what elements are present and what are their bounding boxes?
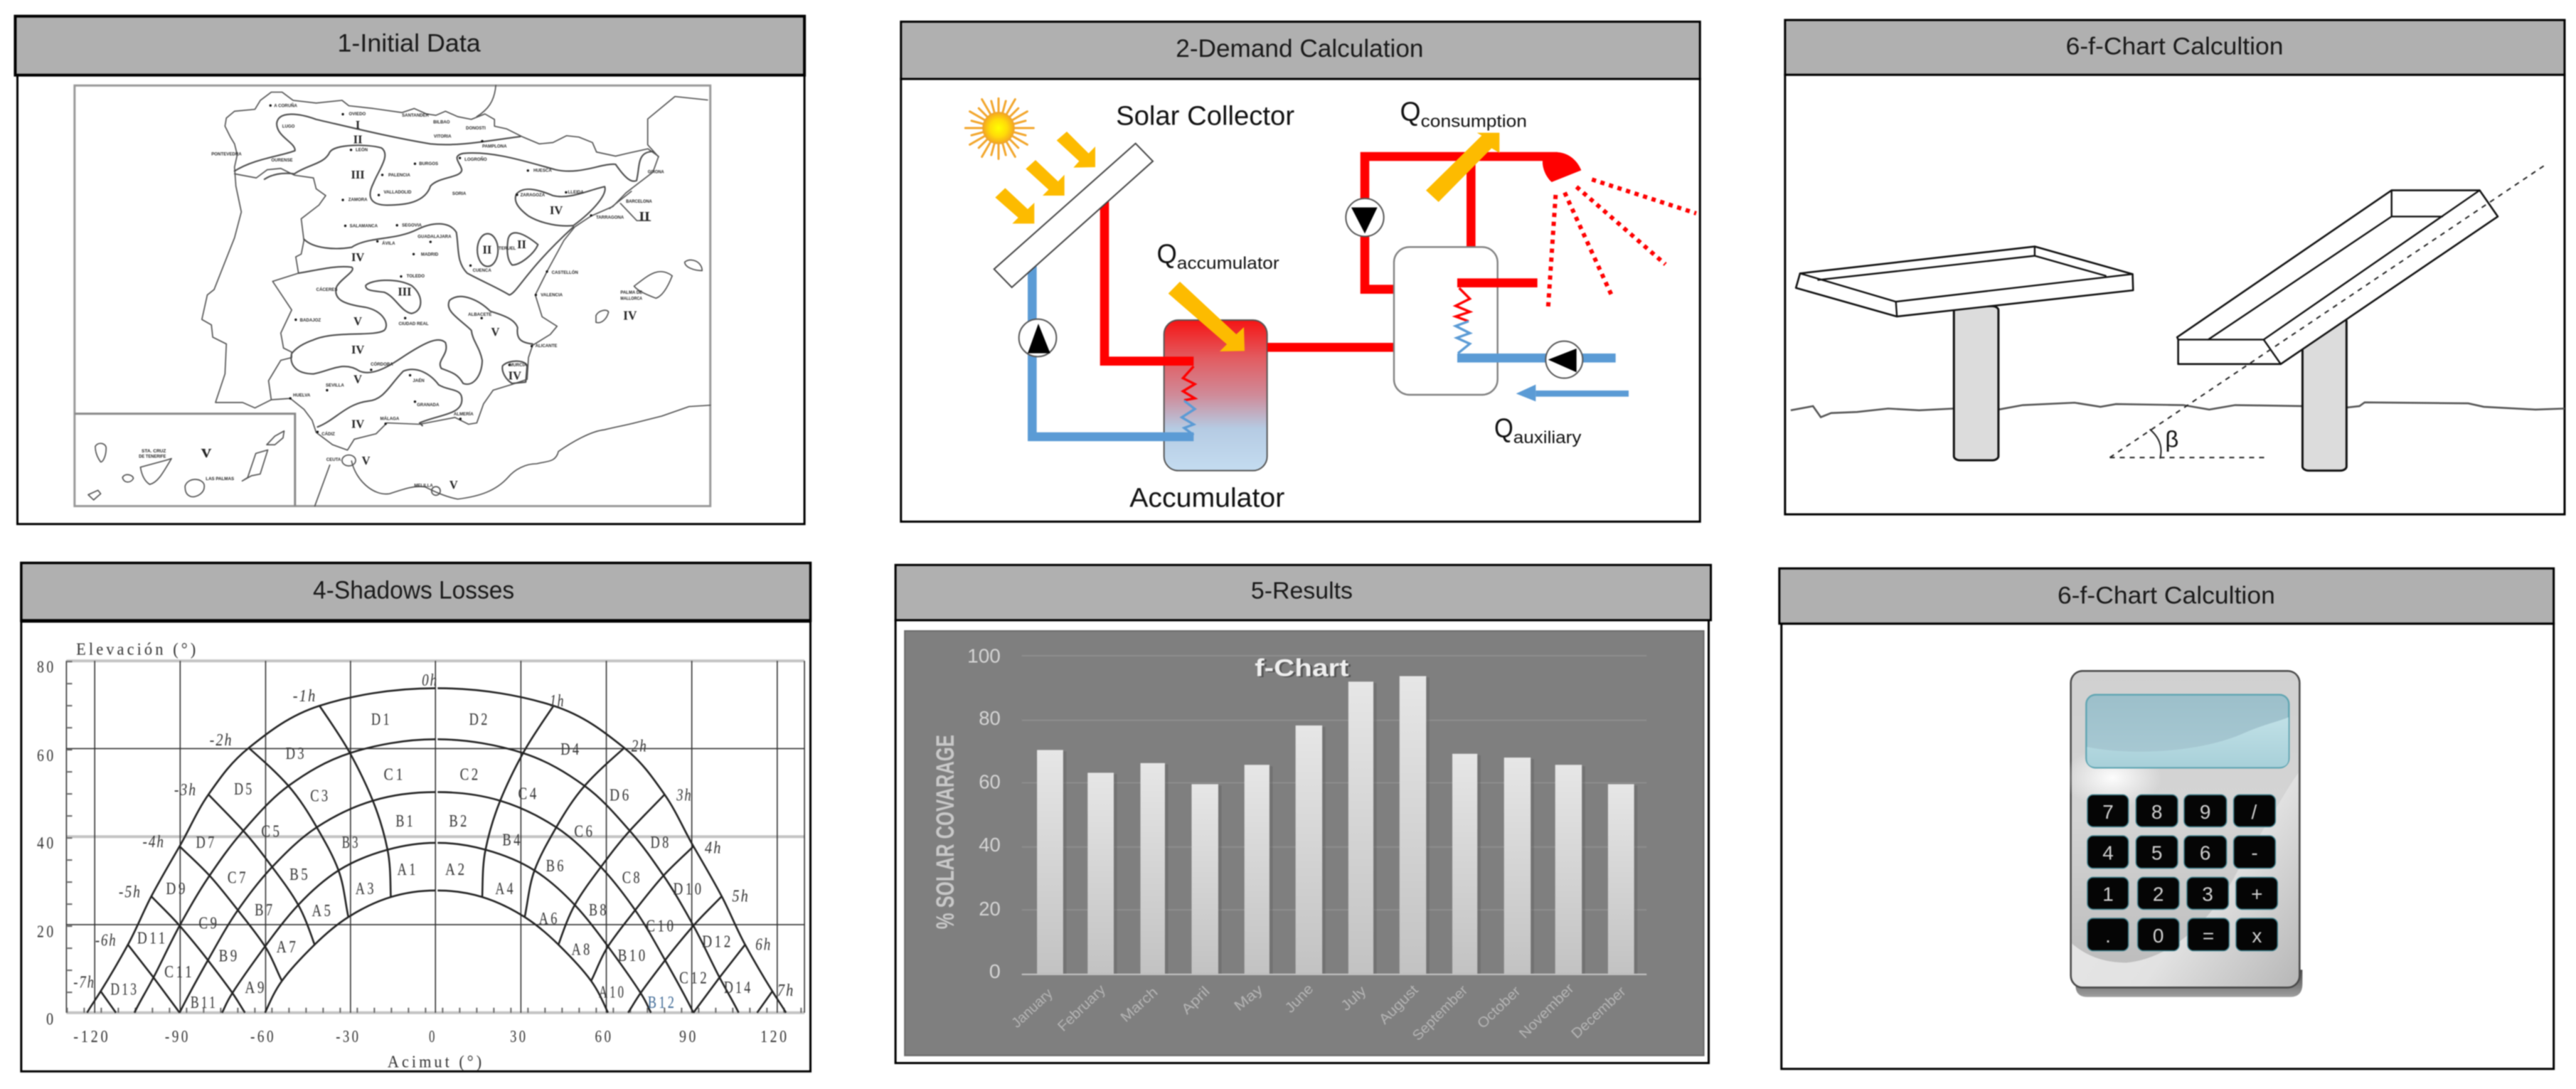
calculator keys: / <box>2251 801 2257 823</box>
panel: 1-Initial Data <box>15 16 804 524</box>
city labels: LOGROÑO <box>464 157 487 162</box>
city labels: ALICANTE <box>536 344 558 349</box>
diagram labels: Q <box>1156 238 1177 269</box>
city labels: ALMERÍA <box>454 411 474 417</box>
axis labels: 120 <box>760 1027 789 1046</box>
sector labels: B1 <box>395 811 415 830</box>
map extras: islands and eastern labels: II <box>639 209 650 224</box>
sector labels: B9 <box>219 945 240 965</box>
chart title: f-Chart <box>1255 654 1349 681</box>
calculator keys: 4 <box>2102 841 2114 864</box>
hour labels: -2h <box>210 730 233 749</box>
city labels: MURCIA <box>509 363 527 368</box>
calculator keys: + <box>2251 883 2263 905</box>
axis labels: 40 <box>37 834 56 853</box>
sector labels: D13 <box>110 979 139 999</box>
y axis values: 60 <box>979 770 1001 793</box>
consumption side of the circuit <box>1267 133 1696 401</box>
zone numerals: IV <box>550 203 563 217</box>
y axis title: % SOLAR COVARAGE <box>932 735 959 929</box>
sector labels: A3 <box>356 878 376 898</box>
axis labels: 0 <box>429 1027 437 1046</box>
month labels: November <box>1516 981 1577 1042</box>
sector labels: B11 <box>191 992 218 1011</box>
diagram labels: Q <box>1400 97 1421 127</box>
sector labels: C11 <box>164 962 194 982</box>
sector labels: C2 <box>460 765 481 784</box>
calculator keys: 7 <box>2102 801 2114 823</box>
sun path curves right <box>437 689 786 1013</box>
zone numerals: II <box>517 238 526 251</box>
zone numerals: II <box>482 243 491 257</box>
panel: 6-f-Chart Calcultion (calculator) <box>1779 568 2554 1069</box>
axis labels: -120 <box>73 1027 110 1046</box>
axis labels: -60 <box>250 1027 276 1046</box>
zone numerals: III <box>398 285 412 298</box>
city labels: DONOSTI <box>466 126 486 131</box>
panel: 5-Results <box>895 565 1711 1063</box>
y axis values: 40 <box>979 833 1001 856</box>
map extras: islands and eastern labels: DE TENERIFE <box>139 454 166 459</box>
y axis values: 20 <box>979 897 1001 920</box>
month labels: March <box>1118 984 1161 1026</box>
zone numerals: IV <box>351 343 364 356</box>
axis labels: 0 <box>46 1009 56 1029</box>
sector labels: B7 <box>255 900 275 919</box>
sector labels: A10 <box>599 982 626 1002</box>
sector labels: C3 <box>310 786 331 805</box>
calculator screen <box>2086 695 2289 767</box>
city labels: LEÓN <box>356 147 368 153</box>
calculator keys: 9 <box>2200 801 2210 823</box>
sector labels: B6 <box>546 856 566 876</box>
calculator keys: 2 <box>2153 883 2163 905</box>
zone numerals: IV <box>351 250 364 264</box>
axis labels: -90 <box>165 1027 191 1046</box>
bars <box>1037 676 1637 974</box>
y axis values: 0 <box>989 960 1001 982</box>
calculator keys: - <box>2251 841 2258 864</box>
map extras: islands and eastern labels: LAS PALMAS <box>206 476 234 482</box>
panel: 4-Shadows Losses <box>21 563 811 1071</box>
sector labels: D1 <box>371 709 392 728</box>
diagram labels: Solar Collector <box>1116 100 1294 131</box>
heading: 6-f-Chart Calcultion: 6-f-Chart Calcultion <box>2066 33 2283 60</box>
consumption pump <box>1346 198 1384 236</box>
city labels: A CORUÑA <box>274 104 298 109</box>
hour labels: -5h <box>119 882 142 901</box>
shower water spray <box>1548 179 1696 308</box>
bar chart: f-Chart solar coverage <box>905 631 1704 1056</box>
hour labels: 6h <box>755 934 772 954</box>
collector side of the circuit <box>965 98 1267 471</box>
sector labels: B12 <box>648 992 676 1011</box>
sun path chart: D14 <box>724 977 752 997</box>
axis labels: 60 <box>37 746 56 765</box>
sector labels: D7 <box>196 832 217 852</box>
arrow: Q consumption <box>1426 133 1499 202</box>
sector labels: D4 <box>560 739 581 758</box>
city labels: ALBACETE <box>468 312 491 317</box>
sector labels: D9 <box>166 878 188 898</box>
arrow: Q auxiliary <box>1516 385 1629 401</box>
hour labels: -1h <box>293 686 316 705</box>
axis labels <box>37 639 789 1071</box>
calculator keys: 6 <box>2200 841 2210 864</box>
sector labels: D2 <box>469 709 490 728</box>
city labels: MADRID <box>421 253 439 257</box>
hour labels: 3h <box>676 785 692 804</box>
hour labels <box>73 670 794 999</box>
axis labels: 90 <box>679 1027 698 1046</box>
arrow: Q accumulator <box>1169 282 1245 351</box>
sun path chart <box>37 639 804 1071</box>
city labels: ZAMORA <box>348 198 368 203</box>
sector labels: A2 <box>445 859 467 878</box>
axis labels: Elevación (°) <box>76 639 198 659</box>
sector labels: D8 <box>651 832 671 852</box>
city labels: ÁVILA <box>382 241 395 246</box>
sector labels: B4 <box>502 829 523 849</box>
month labels: January <box>1008 986 1056 1031</box>
axis labels: 20 <box>37 922 56 941</box>
month labels: September <box>1410 982 1471 1044</box>
zone numerals: V <box>449 478 458 492</box>
month labels <box>1008 981 1629 1044</box>
axis labels: 80 <box>37 657 56 677</box>
sun path curves left <box>87 689 435 1013</box>
hour labels: 5h <box>732 886 750 905</box>
city labels: SORIA <box>452 191 467 196</box>
zone numerals: IV <box>351 417 364 430</box>
map extras: islands and eastern labels: IV <box>623 308 637 323</box>
sector labels: A4 <box>495 878 516 898</box>
chart grid <box>66 661 804 1013</box>
map: climate zones of Spain <box>202 85 710 506</box>
sector labels: C12 <box>679 967 709 987</box>
map extras: islands and eastern labels <box>88 97 708 500</box>
collector loop pipes <box>1032 201 1195 437</box>
heading: 2-Demand Calculation: 2-Demand Calculation <box>1176 34 1423 63</box>
city labels: SANTANDER <box>402 113 430 118</box>
city labels: LUGO <box>282 124 295 129</box>
city labels: HUELVA <box>293 393 311 398</box>
sector labels: D6 <box>610 785 632 804</box>
map extras: islands and eastern labels: PALMA DE <box>620 289 642 294</box>
map extras: islands and eastern labels: GIRONA <box>648 169 664 174</box>
city labels: TOLEDO <box>407 274 425 279</box>
zone numerals: II <box>353 133 363 147</box>
heading: 1-Initial Data: 1-Initial Data <box>337 29 481 57</box>
city labels: PAMPLONA <box>482 144 507 149</box>
city labels: GUADALAJARA <box>417 234 452 239</box>
diagram labels: consumption <box>1421 111 1527 131</box>
map extras: islands and eastern labels: V <box>201 446 212 461</box>
sector labels: C6 <box>574 822 595 841</box>
zone numerals: V <box>362 454 371 467</box>
city labels: SEVILLA <box>326 383 344 388</box>
diagram labels: accumulator <box>1177 253 1279 272</box>
calculator keys <box>2087 795 2277 951</box>
calculator keys: . <box>2105 925 2111 947</box>
map extras: islands and eastern labels: MALLORCA <box>620 296 642 301</box>
month labels: May <box>1231 982 1266 1014</box>
axis labels: -30 <box>336 1027 361 1046</box>
hour labels: 4h <box>705 838 723 857</box>
accumulator tank <box>1164 320 1267 471</box>
calculator keys: = <box>2203 925 2214 947</box>
zone numerals: V <box>202 447 211 460</box>
axis labels: 60 <box>595 1027 613 1046</box>
city labels: CÁCERES <box>316 287 337 292</box>
calculator keys: x <box>2252 925 2262 947</box>
city labels: PALENCIA <box>388 173 410 178</box>
heading: 4-Shadows Losses: 4-Shadows Losses <box>313 576 514 604</box>
diagram labels <box>1116 97 1581 513</box>
city labels: TARRAGONA <box>596 216 624 221</box>
city labels: GRANADA <box>417 403 440 408</box>
month labels: October <box>1474 983 1524 1032</box>
hour labels: 2h <box>632 735 648 755</box>
city labels: VALLADOLID <box>383 190 412 195</box>
diagram labels: auxiliary <box>1513 427 1581 447</box>
city labels: ZARAGOZA <box>521 193 545 198</box>
zone numerals: III <box>351 168 365 181</box>
y axis values <box>967 644 1001 982</box>
city labels: BURGOS <box>419 161 438 166</box>
city labels: MÁLAGA <box>380 417 400 422</box>
city labels <box>211 104 624 488</box>
calculator keys: 8 <box>2151 801 2162 823</box>
zone numerals: IV <box>509 368 521 382</box>
city labels: CEUTA <box>326 457 341 462</box>
panel: 6-f-Chart Calcultion (tilt) <box>1785 20 2565 514</box>
city labels: MELILLA <box>414 483 433 488</box>
city labels: CUENCA <box>473 268 491 273</box>
ground line <box>1791 403 2565 417</box>
panel: 2-Demand Calculation <box>901 22 1700 521</box>
icon: sun <box>965 98 1033 159</box>
axis labels: 30 <box>510 1027 528 1046</box>
zone numerals: V <box>353 314 362 328</box>
sector labels: C8 <box>622 868 642 887</box>
zone numerals: V <box>353 372 362 386</box>
month labels: April <box>1178 984 1213 1018</box>
sector labels: A5 <box>312 901 333 920</box>
sector labels: C9 <box>198 913 219 933</box>
map extras: islands and eastern labels: STA. CRUZ <box>142 448 166 453</box>
sector labels: A8 <box>572 940 592 959</box>
city labels: HUESCA <box>533 169 552 174</box>
city labels: VITORIA <box>434 134 452 139</box>
sector labels: A6 <box>539 908 560 928</box>
collector pump <box>1019 319 1056 356</box>
sector labels: C5 <box>261 822 282 841</box>
sector labels: B10 <box>618 945 648 965</box>
sector labels: A7 <box>277 937 298 957</box>
sector labels: B8 <box>589 900 609 919</box>
sector labels: B3 <box>342 832 361 852</box>
calculator keys: 5 <box>2151 841 2162 864</box>
sector labels: D12 <box>702 932 733 951</box>
hour labels: -7h <box>73 972 95 992</box>
sector labels: A1 <box>398 859 418 878</box>
city labels: PONTEVEDRA <box>211 152 242 157</box>
city labels: BILBAO <box>433 120 450 125</box>
month labels: August <box>1376 982 1422 1028</box>
city labels: TERUEL <box>499 246 516 251</box>
diagram labels: Accumulator <box>1129 482 1284 513</box>
sector labels: C4 <box>518 783 539 803</box>
icon: shower head <box>1543 152 1581 182</box>
city labels: OURENSE <box>271 158 293 163</box>
axis labels: Acimut (°) <box>388 1052 484 1071</box>
city labels: VALENCIA <box>541 293 563 298</box>
y axis values: 80 <box>979 706 1001 729</box>
zone numerals <box>202 118 563 492</box>
sector labels: B2 <box>449 811 469 830</box>
chart title: f-Chart <box>1257 655 1351 683</box>
diagram labels: Q <box>1494 413 1513 443</box>
solar collector panel <box>994 144 1153 287</box>
sector labels: D3 <box>286 743 307 763</box>
sector labels: D10 <box>674 879 704 898</box>
auxiliary pump <box>1545 341 1582 378</box>
sector labels: C7 <box>228 868 248 887</box>
city labels: CASTELLÓN <box>552 270 578 275</box>
city labels: OVIEDO <box>348 112 366 117</box>
city labels: SEGOVIA <box>402 223 422 228</box>
sector labels: C10 <box>646 916 676 935</box>
calculator keys: 1 <box>2102 883 2114 905</box>
zone numerals: I <box>356 118 360 132</box>
pipes and auxiliary tank <box>1267 156 1616 395</box>
zone numerals: V <box>491 325 499 339</box>
month labels: February <box>1055 982 1109 1035</box>
tilt angle construction <box>2110 166 2545 459</box>
month labels: June <box>1282 981 1316 1016</box>
hour labels: 1h <box>550 691 565 711</box>
hour labels: -4h <box>143 832 165 851</box>
sector labels: C1 <box>384 765 405 784</box>
city labels: JAÉN <box>413 378 425 383</box>
hour labels: 7h <box>777 980 794 999</box>
calculator keys: 3 <box>2202 883 2213 905</box>
city labels: LLEIDA <box>568 190 584 195</box>
city labels: CÓRDOBA <box>371 361 393 367</box>
sector labels: D11 <box>137 928 168 947</box>
tilted collector <box>2177 191 2498 471</box>
heading: 5-Results: 5-Results <box>1251 578 1353 604</box>
icon: calculator <box>2063 671 2302 997</box>
sector labels: A9 <box>245 977 267 997</box>
heading: 6-f-Chart Calcultion: 6-f-Chart Calcultion <box>2058 583 2275 609</box>
sector labels <box>110 709 752 1011</box>
month labels: December <box>1568 984 1629 1042</box>
city labels: SALAMANCA <box>350 223 378 228</box>
icon: sun ray arrows <box>995 132 1095 223</box>
city labels: BADAJOZ <box>300 318 321 323</box>
flat collector <box>1796 247 2133 460</box>
calculator keys: 0 <box>2153 925 2163 947</box>
city labels: CÁDIZ <box>321 432 335 437</box>
sector labels: B5 <box>289 864 310 883</box>
sector labels: D5 <box>234 779 254 798</box>
hour labels: -3h <box>174 780 197 799</box>
hour labels: -6h <box>95 930 117 950</box>
city labels: CIUDAD REAL <box>399 322 429 326</box>
month labels: July <box>1338 983 1370 1014</box>
map extras: islands and eastern labels: BARCELONA <box>626 198 652 204</box>
hour labels: 0h <box>422 670 438 689</box>
tilt angle construction: β <box>2165 427 2178 452</box>
y axis values: 100 <box>967 644 1001 667</box>
